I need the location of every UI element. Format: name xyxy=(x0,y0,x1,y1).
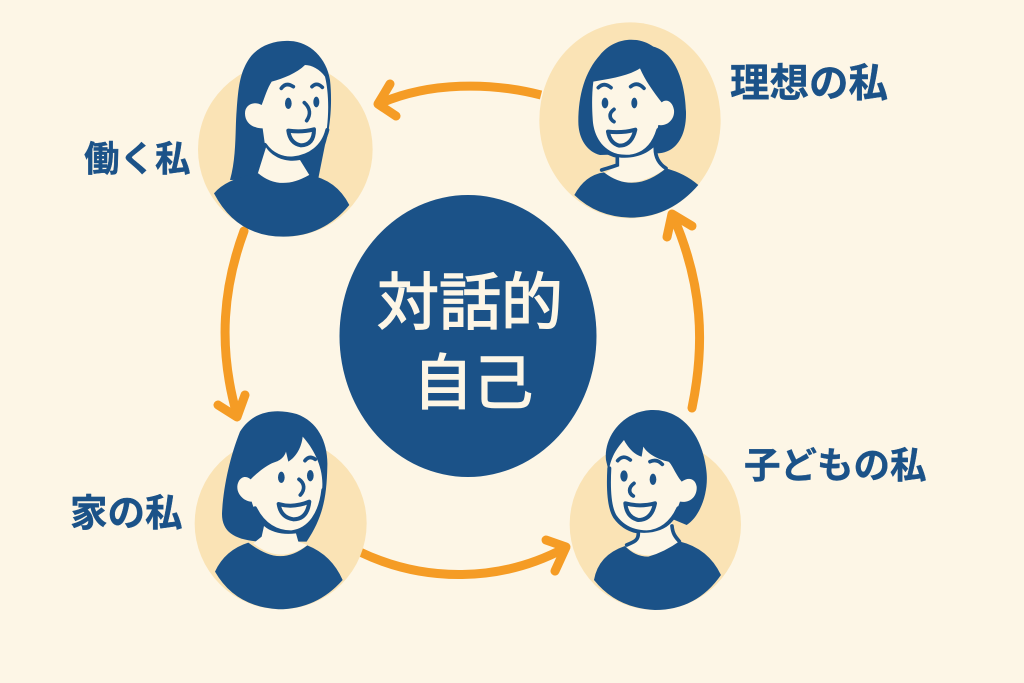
person: ideal self xyxy=(539,22,721,218)
person: working self xyxy=(198,41,373,237)
person: home self xyxy=(195,411,367,609)
center circle: 対話的自己 xyxy=(340,195,596,477)
arrow: child self to ideal self xyxy=(667,214,700,408)
center circle: 対話的自己: 対話的 xyxy=(377,269,563,338)
center circle: 対話的自己: 自己 xyxy=(413,350,533,417)
arrow: working self to home self xyxy=(218,231,245,417)
arrow: ideal self to working self xyxy=(378,84,541,116)
person: child self xyxy=(570,410,741,610)
arrow: home self to child self xyxy=(360,540,566,575)
label: 家の私: 家の私 xyxy=(70,492,182,534)
label: 理想の私: 理想の私 xyxy=(730,62,888,106)
label: 子どもの私: 子どもの私 xyxy=(744,445,926,486)
label: 働く私: 働く私 xyxy=(84,139,191,179)
